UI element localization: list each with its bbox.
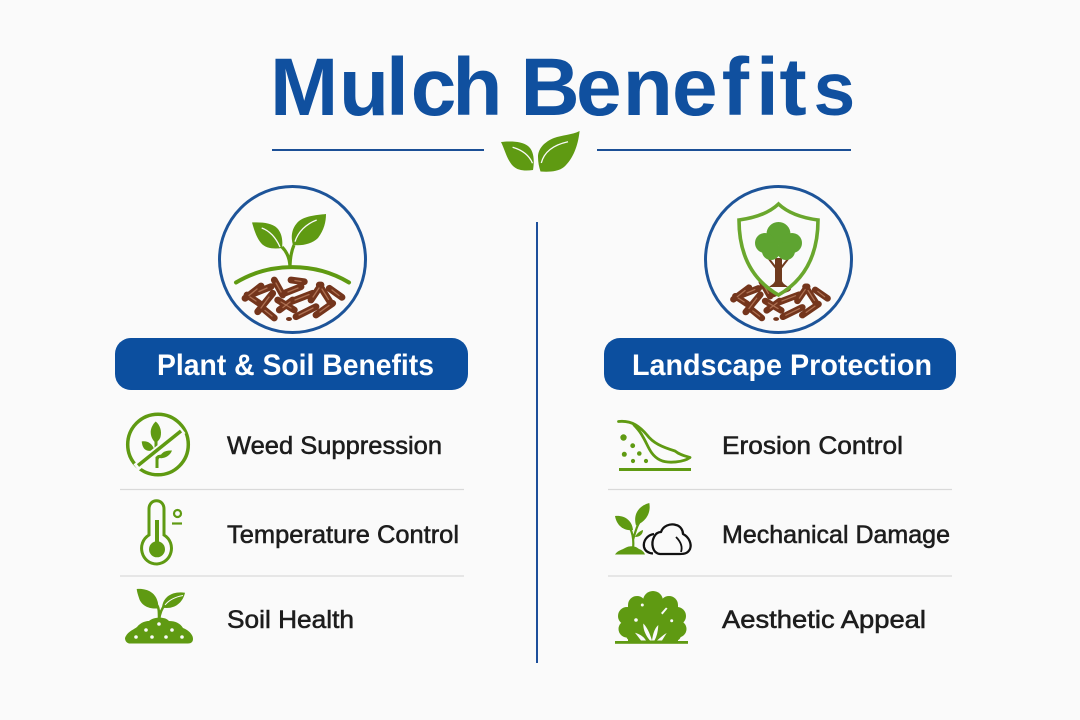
item: aesthetic appeal: Aesthetic Appeal: [722, 606, 926, 634]
heading pill: [115, 338, 468, 390]
item: weed suppression: Weed Suppression: [227, 432, 442, 460]
item: aesthetic appeal: [615, 591, 926, 644]
icon: eroding slope: [618, 421, 691, 471]
icon: soil mound sprout: [125, 589, 193, 644]
heading pill: Landscape Protection: [632, 349, 932, 382]
title: Mulch Benefits: [270, 42, 855, 133]
icon: bush: [615, 591, 688, 644]
item: temperature control: Temperature Control: [227, 521, 459, 549]
icon: sprout and rock: [615, 503, 691, 554]
vertical divider: [536, 222, 538, 663]
icon: right leaf: [538, 131, 580, 172]
item: temperature control: [142, 501, 459, 564]
icon: left leaf: [501, 141, 534, 171]
item: soil health: [125, 589, 354, 644]
item: mechanical damage: [615, 503, 950, 554]
item: soil health: Soil Health: [227, 606, 354, 634]
item: mechanical damage: Mechanical Damage: [722, 521, 950, 549]
icon: shield tree over mulch badge: [706, 186, 852, 332]
icon: seedling over mulch badge: [220, 186, 366, 332]
panel: landscape protection: [604, 186, 956, 644]
heading pill: [604, 338, 956, 390]
item: weed suppression: [128, 414, 442, 475]
panel: plant and soil benefits: [115, 186, 468, 644]
icon: no weeds: [128, 414, 188, 475]
icon: thermometer: [142, 501, 182, 564]
item: erosion control: [618, 421, 903, 471]
item: erosion control: Erosion Control: [722, 432, 903, 460]
title ornament: lines and leaves: [272, 131, 851, 172]
heading pill: Plant & Soil Benefits: [157, 349, 434, 382]
